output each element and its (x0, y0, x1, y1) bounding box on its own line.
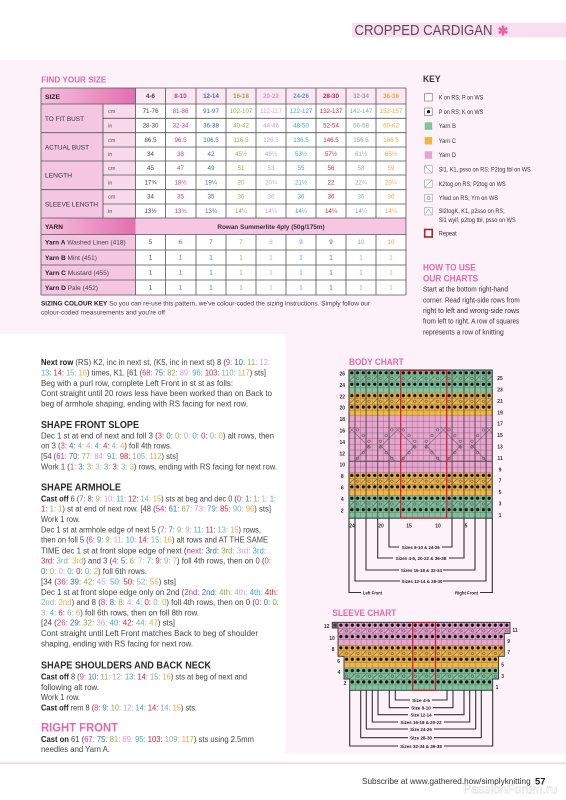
row numbers: 24 (349, 524, 355, 530)
table: sizes: 86.5 (144, 137, 157, 144)
icon: purl dot (425, 108, 432, 116)
icon: sl2togk (425, 208, 432, 215)
page number: 57 (535, 776, 546, 786)
table row labels: SIZE (45, 94, 61, 101)
how to use our charts: HOW TO USE (423, 263, 476, 274)
row numbers: 14 (340, 440, 345, 446)
row numbers: 10 (435, 524, 441, 530)
table: sizes: 1 (149, 255, 153, 262)
row numbers: 1 (496, 685, 499, 691)
table: sizes: 1 (389, 270, 393, 277)
pattern instructions text: Cont straight until 20 rows less have been worked than on Back to (41, 389, 273, 398)
watermark: PassionForum.ru (463, 782, 557, 796)
table: sizes: 10 (388, 239, 395, 246)
footer subscribe text: Subscribe at www.gathered.how/simplyknitting (362, 776, 531, 786)
row numbers (340, 372, 503, 530)
sleeve chart size brackets: Sizes 16-18 & 20-22 (400, 720, 442, 726)
table: sizes: 35 (177, 194, 184, 201)
table: sizes: 56 (328, 165, 335, 172)
row numbers: 20 (378, 524, 384, 530)
table: sizes: 61½ (355, 151, 367, 158)
icon: yarn d swatch (425, 151, 432, 159)
table: sizes: 1 (359, 270, 363, 277)
how to use our charts (423, 263, 520, 336)
table: sizes: 36-38 (203, 123, 219, 130)
table: sizes: 1 (329, 285, 333, 292)
pattern instructions text: shaping, ending with RS facing for next row. (41, 639, 193, 648)
table: sizes: 146.5 (323, 137, 339, 144)
table header sizes: 20-22 (263, 93, 279, 100)
table: sizes: 1 (179, 270, 183, 277)
pattern instructions text: Work 1 (1: 3: 3: 3: 3: 3: 3: 3) rows, ending with RS facing for next row. (41, 463, 277, 472)
pattern instructions text: RIGHT FRONT (41, 721, 119, 735)
table: sizes: 1 (269, 285, 273, 292)
table: sizes: 47 (177, 165, 184, 172)
table: sizes: 122-127 (290, 108, 313, 115)
table row labels: cm (108, 166, 116, 172)
repeat box (401, 370, 447, 518)
sleeve chart size brackets: Size 28-30 (410, 736, 432, 742)
table row labels: Yarn D Pale (452) (45, 285, 98, 292)
row numbers: 5 (499, 490, 502, 496)
panel: key: Sl2togK, K1, p2sso on RS; (439, 208, 505, 215)
table: sizes: 35 (208, 194, 215, 201)
table: sizes: 1 (239, 255, 243, 262)
table: sizes: 14¼ (385, 208, 398, 215)
row numbers: 10 (340, 463, 345, 469)
table: sizes: 40-42 (233, 123, 249, 130)
table header sizes: 12-14 (203, 93, 219, 100)
footer rule (0, 762, 566, 764)
table: sizes: 1 (299, 270, 303, 277)
table: sizes: 49½ (265, 151, 277, 158)
panel: key: Sl1 wyif, p2tog tbl, psso on WS (439, 217, 516, 224)
table: sizes: 42 (208, 151, 215, 158)
how to use our charts: right to left and wrong-side rows (423, 306, 520, 315)
row numbers: 16 (340, 428, 345, 434)
table: sizes: 55 (298, 165, 305, 172)
pattern instructions text: [24 (26: 29: 32: 36: 40: 42: 44: 47) sts] (41, 619, 175, 628)
table: sizes: 13¾ (205, 208, 218, 215)
table: sizes: 49 (208, 165, 215, 172)
table: sizes: 112-117 (260, 108, 282, 115)
table row labels: in (108, 124, 112, 130)
table: sizes: 17¾ (144, 180, 157, 186)
table: sizes: 52-54 (323, 123, 339, 130)
pattern instructions text: Cast off 8 (9: 10: 11: 12: 13: 14: 15: 16) sts at beg of next and (41, 672, 247, 681)
table: sizes: 1 (269, 270, 273, 277)
row numbers: 9 (499, 467, 502, 473)
icon: knit square (425, 94, 432, 101)
sleeve chart size brackets (350, 690, 493, 750)
row numbers: 8 (332, 647, 335, 653)
table: sizes: 71-76 (143, 108, 159, 115)
table: sizes: 14¼ (295, 208, 308, 215)
pattern instructions text: beg of armhole shaping, ending with RS facing for next row. (41, 400, 248, 409)
table: sizes: 53 (268, 165, 275, 172)
panel: key: Repeat (439, 230, 457, 237)
table: sizes: 1 (389, 285, 393, 292)
table: sizes: 22¾ (355, 180, 368, 186)
pattern instructions text (41, 358, 279, 754)
row numbers: 6 (341, 486, 344, 492)
row numbers: 18 (340, 417, 345, 423)
pattern instructions text: Cast on 61 (67: 75: 81: 89: 95: 103: 109: 117) sts using 2.5mm (41, 735, 254, 744)
pattern instructions text: 1: 1: 1) st at end of next row. [48 (54: 61: 67: 73: 79: 85: 90: 96) sts] (41, 505, 271, 514)
heading: sleeve chart: SLEEVE CHART (332, 608, 396, 619)
how to use our charts: OUR CHARTS (423, 274, 478, 285)
table row labels: cm (108, 109, 116, 115)
table row labels: Yarn C Mustard (455) (45, 270, 109, 277)
table: sizes: 10 (358, 239, 365, 246)
row numbers: 12 (324, 624, 330, 630)
how to use our charts: Start at the bottom right-hand (423, 285, 508, 294)
body chart size brackets: Sizes 12-14 & 28-30 (402, 579, 443, 585)
body chart size brackets: Sizes 4-6, 20-22 & 36-38 (396, 556, 447, 562)
row numbers: 13 (497, 444, 503, 450)
icon: k2tog (425, 180, 432, 188)
table: sizes: 1 (149, 270, 153, 277)
how to use our charts: represents a row of knitting (423, 327, 504, 336)
panel: key: P on RS; K on WS (439, 109, 483, 116)
sleeve chart size brackets: Size 24-26 (410, 727, 432, 733)
pattern instructions text: 3: 4: 6: 6: 6) foll 6th rows, then on foll 8th row. (41, 608, 199, 617)
pattern instructions text: SHAPE FRONT SLOPE (41, 420, 139, 431)
table: sizes: 36 (388, 194, 395, 201)
table header sizes: 36-38 (383, 93, 399, 100)
table: sizes: 44-46 (263, 123, 279, 130)
table header sizes: 4-6 (146, 93, 156, 100)
sleeve chart size brackets: Size 12-14 (410, 713, 432, 719)
row numbers: 3 (499, 502, 502, 508)
table: sizes: 14¼ (235, 208, 248, 215)
row numbers: 5 (501, 663, 504, 669)
pattern instructions text: Dec 1 st at armhole edge of next 5 (7: 7: 9: 9: 11: 11: 13: 15) rows, (41, 525, 261, 534)
table: sizes: 1 (359, 255, 363, 262)
pattern instructions text: Dec 1 st at front slope edge only on 2nd (2nd: 2nd: 4th: 4th: 4th: 4th: (41, 588, 278, 597)
table: sizes: 57½ (325, 151, 337, 158)
row numbers: 22 (340, 394, 345, 400)
table: sizes (41, 88, 406, 295)
pattern instructions text: needles and Yarn A. (41, 745, 110, 754)
row numbers: 5 (465, 524, 468, 530)
panel: key: K on RS; P on WS (439, 94, 483, 102)
repeat box (413, 622, 436, 690)
table: sizes: 14¼ (355, 208, 368, 215)
table: sizes: 1 (359, 285, 363, 292)
row numbers: 8 (341, 474, 344, 480)
table: sizes: 142-147 (350, 108, 373, 115)
table row labels: Rowan Summerlite 4ply (50g/175m) (217, 224, 325, 231)
row numbers (324, 624, 518, 691)
table: sizes: 36 (268, 194, 275, 201)
table: sizes: 45½ (235, 151, 247, 158)
row numbers: 10 (329, 636, 335, 642)
icon: sl1 k1 psso (425, 166, 432, 173)
table header sizes: 32-34 (353, 93, 369, 100)
panel: key (423, 74, 531, 237)
table: sizes: 58 (358, 165, 365, 172)
body chart size brackets: Right Front (455, 590, 478, 596)
row numbers: 20 (340, 406, 345, 412)
table: sizes: 96.5 (174, 137, 187, 144)
row numbers: 23 (497, 388, 503, 394)
table: sizes: 1 (209, 285, 213, 292)
pattern instructions text: Cast off 6 (7: 8: 9: 10: 11: 12: 14: 15) sts at beg and dec 0 (0: 1: 1: 1: 1: (41, 494, 276, 503)
panel: key: Yfwd on RS; Yrn on WS (439, 195, 498, 202)
table: sizes: 28-30 (143, 123, 159, 130)
table row labels: cm (108, 194, 116, 200)
table: sizes: 18½ (174, 180, 187, 186)
icon: yfwd (425, 194, 432, 202)
panel: white pattern text column (0, 334, 286, 754)
table: sizes: 36 (238, 194, 245, 201)
table header sizes: 28-30 (323, 93, 339, 100)
pattern instructions text: SHAPE ARMHOLE (41, 483, 121, 494)
how to use our charts: from left to right. A row of squares (423, 316, 520, 326)
table row labels: SLEEVE LENGTH (45, 201, 98, 208)
pattern instructions text: Work 1 row. (41, 693, 80, 702)
table row labels: Yarn A Washed Linen (418) (45, 240, 126, 247)
table: sizes: 7 (239, 239, 243, 246)
table: sizes: 23¼ (385, 180, 398, 186)
panel: key: K2tog on RS; P2tog on WS (439, 181, 506, 188)
table row labels: in (108, 180, 112, 186)
table: sizes: 1 (179, 255, 183, 262)
pattern instructions text: following alt row. (41, 683, 99, 692)
pattern instructions text: 0: 0: 0: 0: 0: 0: 2) foll 6th rows. (41, 567, 147, 576)
table: sizes: 1 (209, 270, 213, 277)
pattern instructions text: SHAPE SHOULDERS AND BACK NECK (41, 661, 212, 672)
table: sizes: 13½ (144, 208, 157, 215)
table: sizes: 8 (269, 239, 273, 246)
table: sizes: 38 (177, 151, 184, 158)
table row labels: cm (108, 138, 116, 144)
table: sizes: 1 (179, 285, 183, 292)
sleeve chart size brackets: Sizes 32-34 & 36-38 (400, 744, 442, 750)
pattern instructions text: Cast off rem 8 (8: 9: 10: 12: 14: 14: 14: 15) sts. (41, 704, 197, 713)
panel: key: Sl1, K1, psso on RS; P2tog tbl on WS (439, 166, 531, 174)
row numbers: 9 (507, 639, 510, 645)
table: sizes: 102-107 (230, 108, 253, 115)
table: sizes: 45 (147, 165, 154, 172)
table: sizes: 34 (147, 151, 154, 158)
table: sizes: 34 (147, 194, 154, 201)
table: sizes: 1 (329, 255, 333, 262)
table: sizes: 166.5 (383, 137, 399, 144)
panel: key: Yarn D (439, 152, 456, 159)
table: sizes: 36 (298, 194, 305, 201)
pattern instructions text: Beg with a purl row, complete Left Front in st st as folls: (41, 379, 233, 388)
table: sizes: 1 (299, 285, 303, 292)
table: sizes: 126.5 (263, 137, 279, 144)
heading: find your size: FIND YOUR SIZE (41, 74, 107, 84)
table row labels: in (108, 209, 112, 215)
row numbers: 25 (497, 376, 503, 382)
table: sizes: 13¾ (174, 208, 187, 215)
pattern instructions text: Cont straight until Left Front matches Back to beg of shoulder (41, 629, 258, 638)
table row labels: LENGTH (45, 172, 72, 180)
table row labels: TO FIT BUST (45, 116, 84, 123)
table: sizes: 51 (238, 165, 245, 172)
pattern instructions text: on 3 (3: 4: 4: 4: 4: 4: 4: 4) foll 4th rows. (41, 442, 172, 451)
table row labels: YARN (45, 224, 63, 231)
sleeve chart size brackets: Size 4-6 (412, 698, 430, 704)
pattern instructions text: 3rd: 3rd: 3rd) and 3 (4: 5: 6: 7: 7: 9: 9: 7) foll 4th rows, then on 0 (0: (41, 557, 271, 566)
body chart size brackets: Left Front (363, 590, 382, 596)
panel: key: Yarn C (439, 138, 456, 145)
table: sizes: 22 (328, 180, 335, 186)
table: sizes: 9 (329, 239, 333, 246)
table: sizes: 53½ (295, 151, 307, 158)
table header sizes: 8-10 (174, 93, 187, 100)
table: sizes: 1 (149, 285, 153, 292)
icon: yarn c swatch (425, 137, 432, 144)
table: sizes: 6 (179, 239, 183, 246)
icon: yarn b swatch (425, 122, 432, 130)
row numbers: 15 (406, 524, 412, 530)
table: sizes: 106.5 (203, 137, 219, 144)
chart: body chart (340, 370, 503, 530)
how to use our charts: corner. Read right-side rows from (423, 295, 520, 304)
table: sizes: 32-34 (173, 123, 189, 130)
row numbers: 12 (340, 451, 345, 457)
table: sizes: 152-157 (380, 108, 403, 115)
pattern instructions text: 2nd: 2nd) and 8 (8: 8: 8: 4: 4: 0: 0: 0) foll 4th rows, then on 0 (0: 0: 0: (41, 598, 279, 607)
row numbers: 11 (512, 628, 518, 634)
table header sizes: 16-18 (233, 93, 249, 100)
icon: repeat (425, 230, 432, 237)
row numbers: 3 (501, 674, 504, 680)
row numbers: 19 (497, 410, 503, 416)
table: sizes: 36 (328, 194, 335, 201)
row numbers: 6 (337, 659, 340, 665)
pattern instructions text: Dec 1 st at end of next and foll 3 (3: 0: 0: 0: 0: 0: 0: 0) alt rows, then (41, 431, 274, 440)
pattern instructions text: [54 (61: 70: 77: 84: 91: 98: 105: 112) sts] (41, 452, 178, 461)
table: sizes: 59 (388, 165, 395, 172)
row numbers: 11 (497, 456, 503, 462)
table: sizes: 1 (299, 255, 303, 262)
table: sizes: 1 (239, 285, 243, 292)
table: sizes: 1 (239, 270, 243, 277)
row numbers: 7 (507, 650, 510, 656)
header tab: cropped cardigan (352, 23, 566, 39)
table: sizes: 9 (299, 239, 303, 246)
table: sizes: 132-137 (320, 108, 343, 115)
table: sizes: 56-58 (353, 123, 369, 130)
row numbers: 2 (344, 681, 347, 687)
pattern instructions text: [34 (36: 39: 42: 45: 50: 50: 52: 55) sts] (41, 577, 176, 586)
row numbers: 4 (338, 670, 341, 676)
sizing colour key note: SIZING COLOUR KEY So you can re-use this pattern, we've colour-coded the sizing instructions. Simply follow our (41, 300, 371, 307)
body chart size brackets: Sizes 16-18 & 32-34 (401, 568, 442, 574)
table: sizes: 20¾ (265, 180, 278, 186)
row numbers: 24 (340, 383, 345, 389)
pattern instructions text: 13: 14: 15: 16) times, K1. [61 (68: 75: 82: 89: 96: 103: 110: 117) sts] (41, 368, 266, 377)
table: sizes: 65½ (385, 151, 397, 158)
table: sizes: 48-50 (293, 123, 309, 130)
table: sizes: 7 (209, 239, 213, 246)
row numbers: 15 (497, 433, 503, 439)
table: sizes: 20 (238, 180, 245, 186)
table: sizes: 14¼ (265, 208, 278, 215)
row numbers: 2 (341, 508, 344, 514)
table: sizes: 1 (329, 270, 333, 277)
table: sizes: 81-86 (173, 108, 189, 115)
table header sizes: 24-26 (293, 93, 309, 100)
panel: key: Yarn B (439, 123, 456, 130)
body chart size brackets (349, 518, 492, 596)
table: sizes: 136.5 (293, 137, 309, 144)
table row labels: Yarn B Mint (451) (45, 255, 97, 262)
key heading: KEY (423, 74, 440, 84)
row numbers: 1 (499, 513, 502, 519)
table row labels: in (108, 152, 112, 158)
table: sizes: 156.5 (353, 137, 369, 144)
sleeve chart size brackets: Size 8-10 (411, 706, 431, 712)
table: sizes: 14¼ (325, 208, 338, 215)
table: sizes: 36 (358, 194, 365, 201)
sizing colour key note: colour-coded measurements and you're off (41, 310, 165, 317)
chart: sleeve chart (324, 622, 518, 691)
row numbers: 26 (340, 372, 345, 378)
table: sizes: 1 (389, 255, 393, 262)
table: sizes: 5 (149, 239, 153, 246)
pattern instructions text: Work 1 row. (41, 515, 80, 524)
table: sizes: 91-97 (203, 108, 219, 115)
row numbers: 21 (497, 399, 503, 405)
sizing colour key note (41, 300, 371, 317)
table: sizes: 60-62 (383, 123, 399, 130)
table: sizes: 116.5 (233, 137, 249, 144)
table row labels: ACTUAL BUST (45, 144, 89, 151)
row numbers: 7 (499, 479, 502, 485)
pattern instructions text: then on foll 5 (6: 9: 9: 11: 10: 14: 15: 16) alt rows and AT THE SAME (41, 536, 268, 545)
table: sizes: 19¼ (205, 180, 218, 186)
header tab: cropped cardigan: CROPPED CARDIGAN (354, 23, 492, 39)
pattern instructions text: Next row (RS) K2, inc in next st, (K5, inc in next st) 8 (9: 10: 11: 12: (41, 358, 270, 367)
table: sizes: 1 (209, 255, 213, 262)
table row labels (45, 94, 325, 292)
row numbers: 4 (341, 497, 344, 503)
row numbers: 17 (497, 422, 503, 428)
pattern instructions text: TIME dec 1 st at front slope edge of next (next: 3rd: 3rd: 3rd: 3rd: (41, 546, 266, 555)
body chart size brackets: Sizes 8-10 & 24-26 (402, 545, 440, 551)
heading: body chart: BODY CHART (349, 357, 404, 368)
table: sizes: 21½ (295, 180, 307, 186)
table: sizes: 1 (269, 255, 273, 262)
